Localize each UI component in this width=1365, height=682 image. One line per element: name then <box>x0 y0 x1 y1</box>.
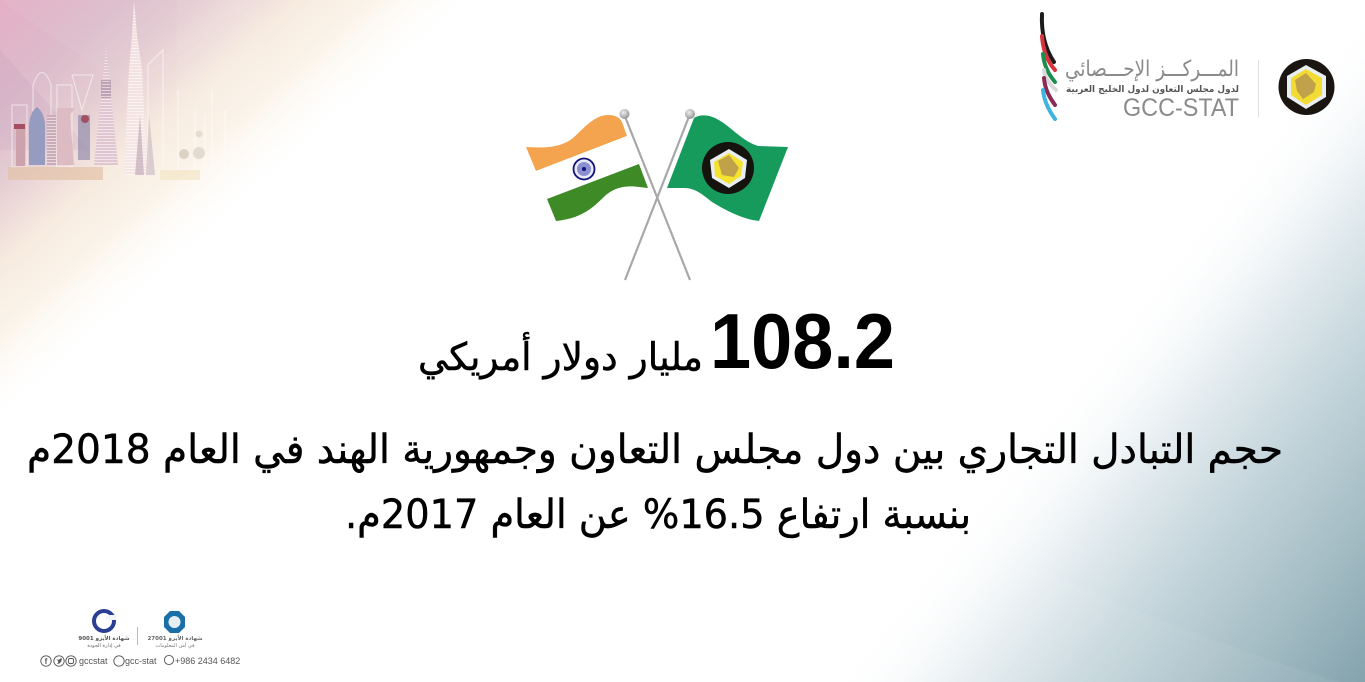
blue tower <box>29 107 45 165</box>
India flag <box>526 115 648 221</box>
ISO 9001 badge <box>78 611 130 649</box>
logo: GCC-STAT <box>1042 14 1334 122</box>
ISO 27001 badge: شهادة الأيزو 27001 <box>147 634 203 642</box>
logo Arabic name: المـــركـــز الإحـــصائي <box>1065 57 1239 82</box>
contact phone: ‭+986 2434 6482‬ <box>175 656 240 666</box>
GCC flag <box>667 115 788 221</box>
description line 2: بنسبة ارتفاع 16.5% عن العام 2017م. <box>345 492 971 538</box>
ISO 27001 badge <box>147 611 203 649</box>
kuwait towers <box>179 130 205 159</box>
logo Arabic subtitle: لدول مجلس التعاون لدول الخليج العربية <box>1066 85 1239 95</box>
ISO 9001 badge: شهادة الأيزو 9001 <box>78 634 130 642</box>
Ashoka chakra <box>574 158 594 180</box>
logo Latin name: GCC-STAT <box>1123 94 1239 122</box>
ISO 9001 badge: في إدارة الجودة <box>87 643 121 649</box>
logo emblem <box>1278 59 1334 115</box>
flags: India and GCC crossed <box>526 109 788 280</box>
footer: certificates and contacts <box>41 611 240 666</box>
faisaliah tower <box>78 115 90 160</box>
tall tower <box>124 0 147 175</box>
logo ribbons <box>1042 14 1056 119</box>
pole balls <box>620 109 695 119</box>
spire tower <box>94 46 118 165</box>
pole: India <box>624 114 690 280</box>
contact handle: gcc-stat: gcc-stat <box>125 656 157 666</box>
ISO 27001 badge: في أمن المعلومات <box>156 642 195 649</box>
red tower <box>14 124 25 166</box>
skyline illustration <box>8 0 225 180</box>
kingdom tower <box>47 108 75 165</box>
GCC emblem <box>702 142 754 194</box>
bahrain towers <box>135 115 155 175</box>
pole: GCC <box>625 114 690 280</box>
ground <box>8 167 200 180</box>
social icons <box>41 655 174 666</box>
contact handle: gccstat: gccstat <box>79 656 108 666</box>
headline unit: مليار دولار أمريكي <box>418 332 703 380</box>
headline figure: 108.2 <box>710 297 895 385</box>
social icons: f <box>45 657 48 666</box>
description line 1: حجم التبادل التجاري بين دول مجلس التعاون وجمهورية الهند في العام 2018م <box>27 427 1283 473</box>
